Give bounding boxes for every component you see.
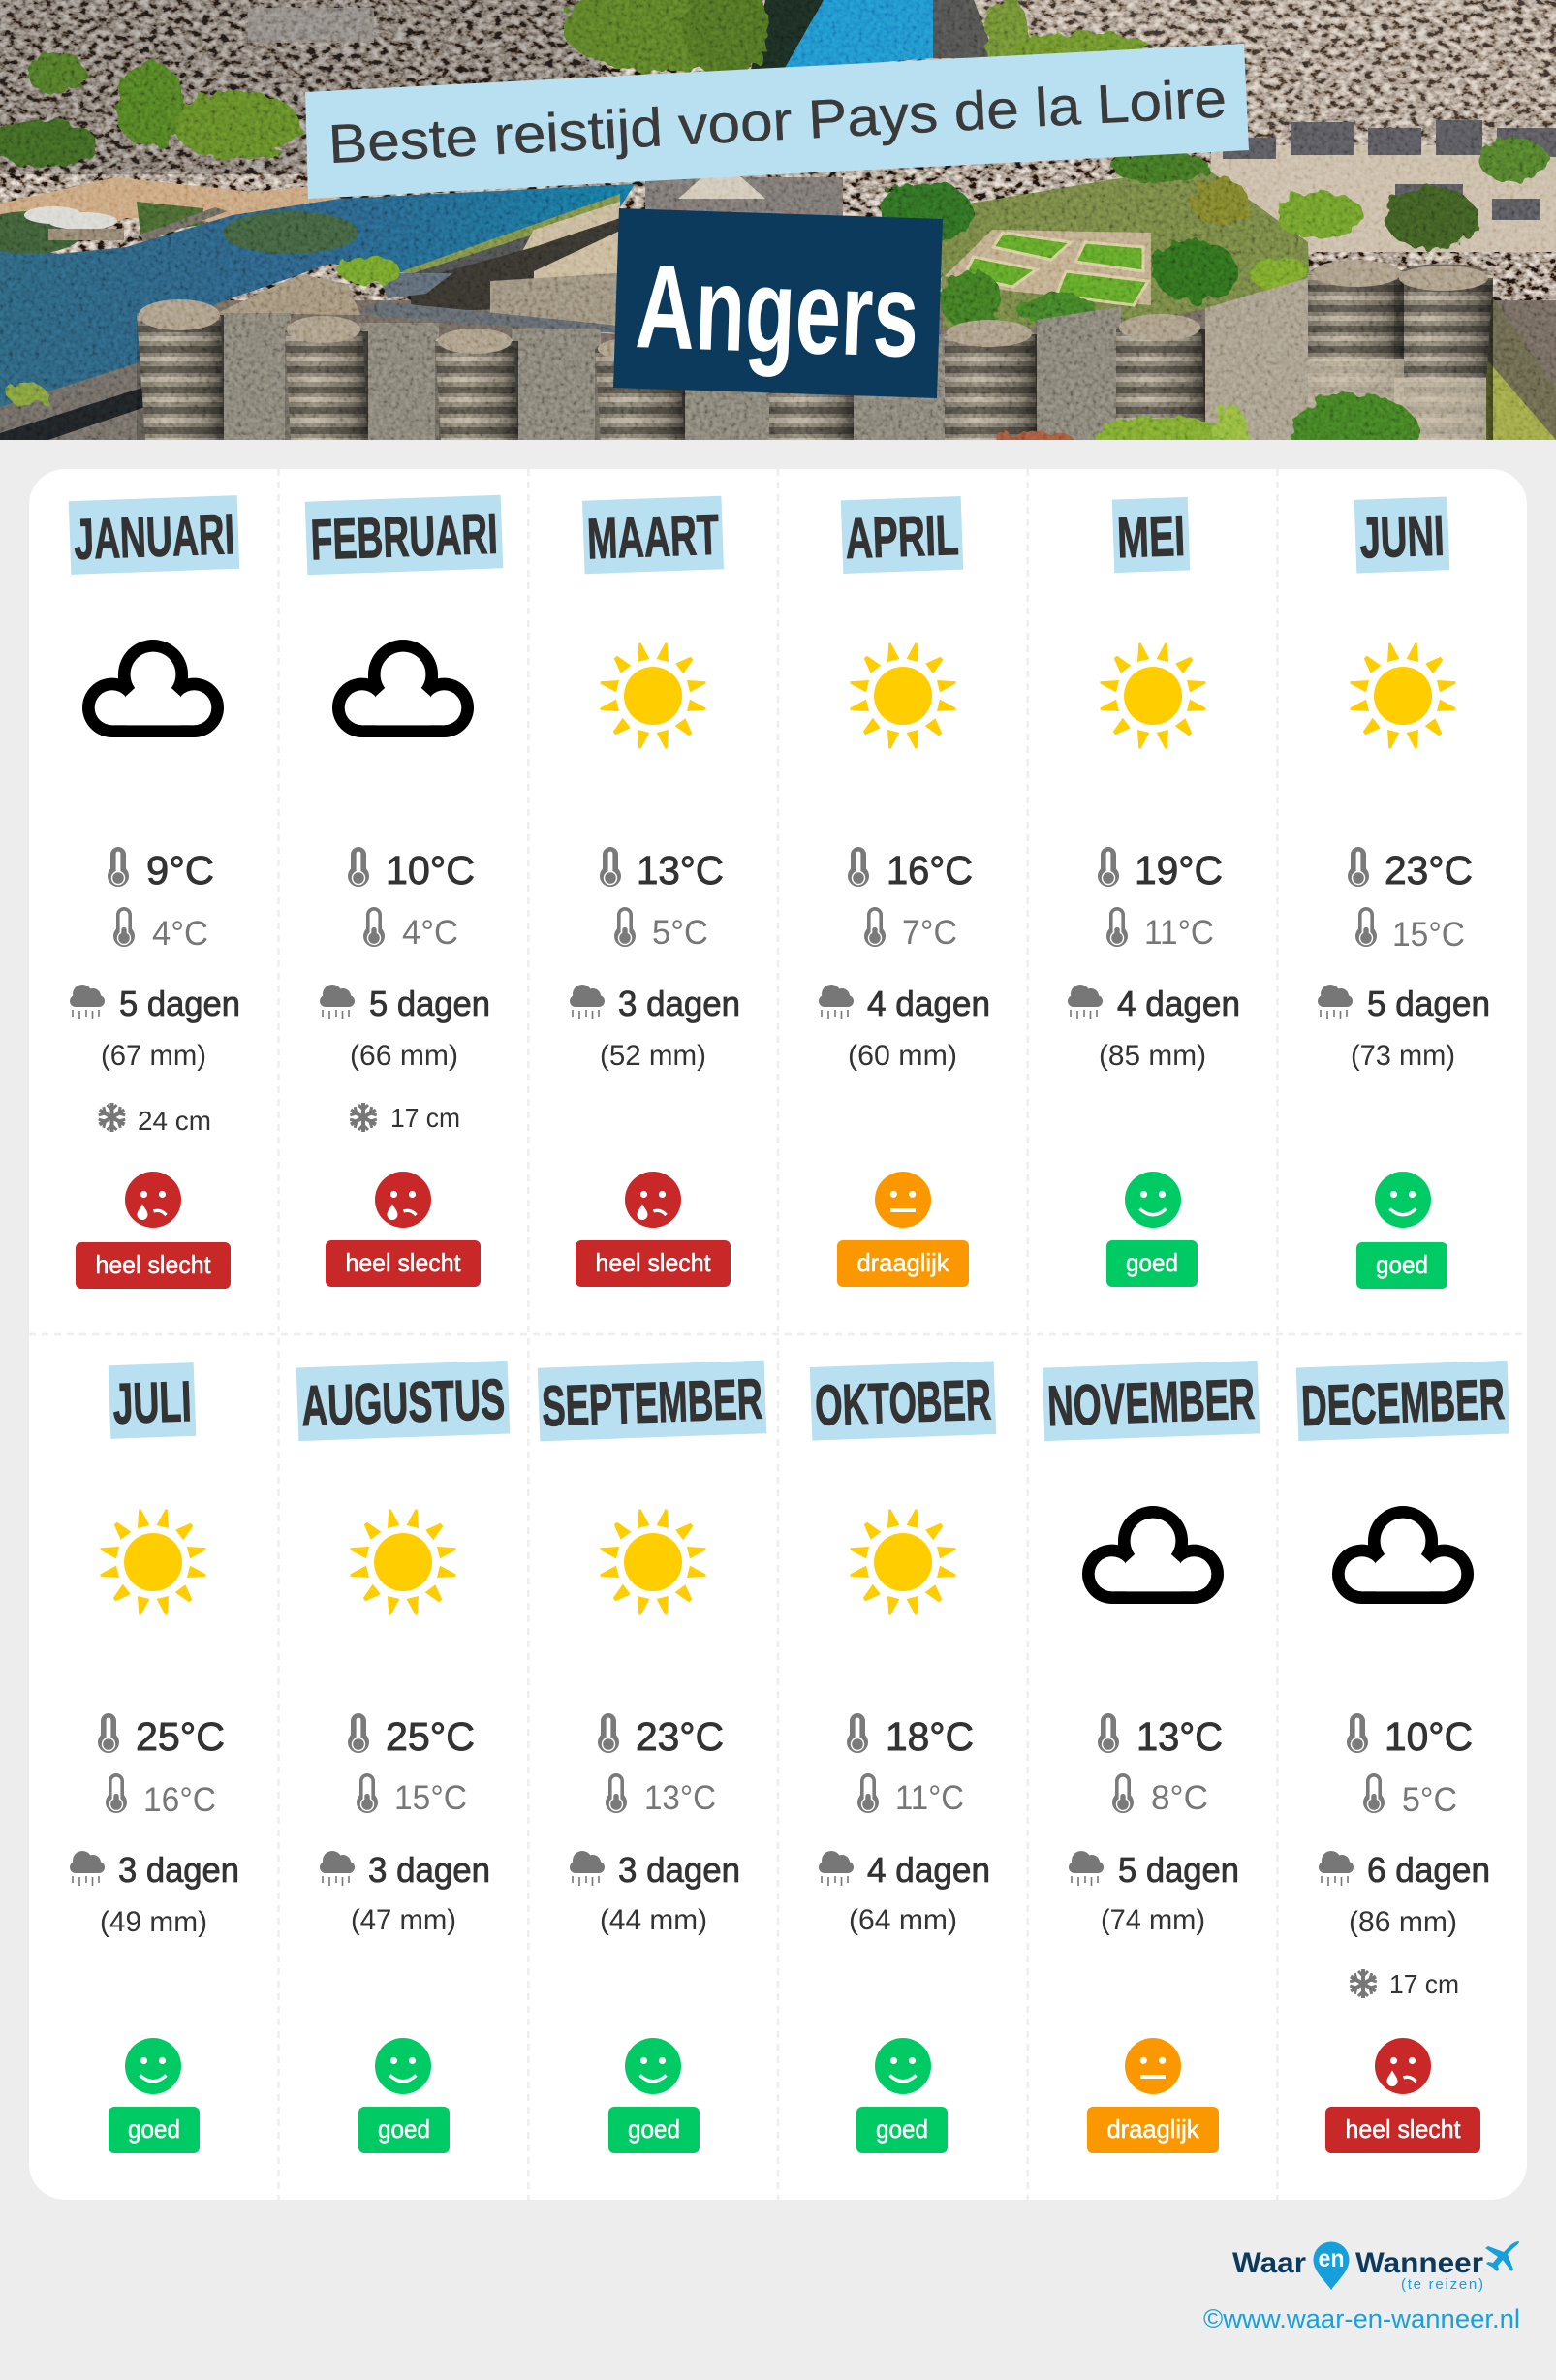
icon: thermometer low <box>857 1773 879 1813</box>
heading: november <box>1043 1361 1260 1441</box>
heading: maart: MAART <box>586 503 720 571</box>
heading: juli <box>109 1362 196 1439</box>
rating badge: goed <box>128 2114 180 2144</box>
max temperature: 16°C <box>887 848 973 892</box>
rating badge: goed <box>628 2114 680 2144</box>
rating badge: heel slecht <box>595 1248 711 1277</box>
icon: happy face <box>1125 1172 1181 1228</box>
website credit: ©www.waar-en-wanneer.nl <box>1203 2304 1520 2333</box>
max temperature: 23°C <box>1385 848 1473 892</box>
icon: sun <box>101 1510 205 1614</box>
rainy days: 6 dagen <box>1367 1850 1490 1890</box>
month: augustus <box>296 1361 510 2153</box>
icon: rain <box>570 1851 605 1886</box>
plaza and inner walls <box>490 202 620 334</box>
trees <box>0 0 1548 406</box>
icon: cloud <box>82 640 224 737</box>
min temperature: 5°C <box>652 914 708 952</box>
icon: sun <box>851 643 955 748</box>
icon: happy face <box>625 2038 681 2094</box>
month: december <box>1296 1361 1509 2153</box>
month: juli <box>70 1362 239 2153</box>
icon: rain <box>70 1851 105 1886</box>
heading: augustus <box>296 1361 510 1441</box>
icon: happy face <box>125 2038 181 2094</box>
icon: cloud <box>332 640 474 737</box>
rainfall: (86 mm) <box>1349 1906 1457 1938</box>
rainfall: (47 mm) <box>351 1904 456 1936</box>
min temperature: 4°C <box>402 914 458 952</box>
icon: sun <box>851 1510 955 1614</box>
rainy days: 4 dagen <box>867 1850 990 1890</box>
road and lower riverbank <box>0 404 9 407</box>
rainy days: 5 dagen <box>1118 1850 1239 1890</box>
icon: thermometer low <box>1106 907 1128 947</box>
icon: thermometer low <box>1355 907 1377 947</box>
icon: sun <box>601 1510 705 1614</box>
icon: snowflake <box>349 1103 378 1132</box>
heading: september <box>538 1361 766 1441</box>
icon: thermometer high <box>600 847 621 887</box>
icon: happy face <box>375 2038 431 2094</box>
heading: mei <box>1112 497 1190 573</box>
max temperature: 25°C <box>386 1714 475 1759</box>
icon: neutral face <box>1125 2038 1181 2094</box>
buildings on the right <box>1211 145 1556 252</box>
upper river <box>784 0 933 70</box>
heading: juni <box>1354 497 1449 573</box>
heading: januari <box>69 495 239 575</box>
icon: sun <box>1351 643 1455 748</box>
rainy days: 5 dagen <box>369 984 490 1023</box>
min temperature: 15°C <box>1392 916 1465 954</box>
icon: happy face <box>875 2038 931 2094</box>
rainfall: (49 mm) <box>100 1906 207 1938</box>
panel: monthly climate calendar <box>29 469 1527 2200</box>
icon: thermometer low <box>864 907 886 947</box>
icon: thermometer high <box>108 847 129 887</box>
icon: rain <box>819 1851 854 1886</box>
heading: augustus: AUGUSTUS <box>300 1367 506 1438</box>
icon: thermometer low <box>614 907 636 947</box>
max temperature: 18°C <box>886 1714 974 1759</box>
icon: very bad face <box>1375 2038 1431 2094</box>
rainy days: 5 dagen <box>119 984 240 1023</box>
icon: rain <box>1069 1851 1104 1886</box>
icon: cloud <box>1082 1506 1224 1604</box>
heading: maart <box>582 496 724 574</box>
max temperature: 9°C <box>146 848 214 892</box>
icon: snowflake <box>1349 1969 1378 1998</box>
hero photo: aerial view of Angers castle and the Maine river <box>0 0 1556 468</box>
min temperature: 7°C <box>902 914 957 952</box>
icon: thermometer high <box>98 1713 119 1753</box>
rating badge: goed <box>378 2114 430 2144</box>
title banner <box>305 44 1249 199</box>
icon: very bad face <box>125 1172 181 1228</box>
rating badge <box>109 2107 200 2153</box>
max temperature: 13°C <box>1136 1714 1223 1759</box>
rating badge <box>358 2107 450 2153</box>
rating badge <box>76 1242 231 1289</box>
min temperature: 8°C <box>1151 1779 1208 1817</box>
icon: thermometer low <box>357 1773 378 1813</box>
icon: rain <box>1318 985 1353 1019</box>
rating badge <box>1106 1240 1198 1287</box>
icon: thermometer high <box>848 847 869 887</box>
icon: thermometer high <box>847 1713 868 1753</box>
rainy days: 4 dagen <box>1117 984 1240 1023</box>
rainy days: 3 dagen <box>618 1850 740 1890</box>
rating badge: heel slecht <box>345 1248 461 1277</box>
logo: Waar en Wanneer: Wanneer <box>1355 2247 1483 2279</box>
rainfall: (64 mm) <box>849 1904 957 1936</box>
icon: happy face <box>1375 1172 1431 1228</box>
moored boats <box>24 206 124 240</box>
heading: april <box>841 496 963 574</box>
heading: juni: JUNI <box>1358 504 1446 570</box>
icon: thermometer high <box>1347 1713 1368 1753</box>
rating badge <box>856 2107 948 2153</box>
min temperature: 4°C <box>152 915 208 953</box>
heading: november: NOVEMBER <box>1046 1367 1256 1438</box>
rainfall: (66 mm) <box>350 1040 458 1072</box>
max temperature: 10°C <box>386 848 475 892</box>
month: april <box>819 496 990 1287</box>
castle towers <box>137 261 1493 440</box>
rating badge: draaglijk <box>1106 2114 1199 2144</box>
garden terraces <box>940 165 1310 329</box>
heading: april: APRIL <box>844 503 960 571</box>
heading: februari: FEBRUARI <box>309 502 499 572</box>
icon: thermometer high <box>348 847 369 887</box>
icon: thermometer low <box>1112 1773 1134 1813</box>
icon: thermometer high <box>1098 847 1119 887</box>
icon: snowflake <box>97 1103 127 1132</box>
heading: januari: JANUARI <box>73 502 235 572</box>
icon: thermometer high <box>348 1713 369 1753</box>
icon: thermometer low <box>606 1773 627 1813</box>
icon: sun <box>601 643 705 748</box>
icon: very bad face <box>625 1172 681 1228</box>
icon: rain <box>320 985 355 1019</box>
heading: oktober: OKTOBER <box>814 1367 992 1438</box>
icon: thermometer low <box>113 907 135 947</box>
rating badge: heel slecht <box>95 1250 211 1279</box>
icon: sun <box>351 1510 455 1614</box>
icon: thermometer low <box>106 1773 127 1813</box>
max temperature: 25°C <box>136 1714 225 1759</box>
rainy days: 5 dagen <box>1367 984 1490 1023</box>
icon: thermometer low <box>363 907 385 947</box>
icon: map pin: en <box>1318 2245 1345 2272</box>
rating badge <box>608 2107 700 2153</box>
icon: rain <box>70 985 105 1019</box>
heading: september: SEPTEMBER <box>541 1367 763 1438</box>
heading: oktober <box>810 1361 996 1441</box>
large river <box>0 184 635 407</box>
icon: rain <box>819 985 854 1019</box>
castle walls <box>217 277 1310 440</box>
rainfall: (60 mm) <box>848 1040 957 1072</box>
rainfall: (44 mm) <box>600 1904 707 1936</box>
min temperature: 11°C <box>895 1779 964 1817</box>
rainfall: (52 mm) <box>600 1040 706 1072</box>
icon: neutral face <box>875 1172 931 1228</box>
min temperature: 15°C <box>394 1779 467 1817</box>
min temperature: 11°C <box>1144 914 1214 952</box>
icon: rain <box>1319 1851 1354 1886</box>
icon: very bad face <box>375 1172 431 1228</box>
logo: Waar en Wanneer: (te reizen) <box>1401 2276 1483 2293</box>
month: februari <box>305 495 503 1287</box>
min temperature: 16°C <box>143 1781 216 1819</box>
foreground trees <box>996 391 1420 440</box>
logo: Waar en Wanneer: Waar <box>1232 2247 1306 2279</box>
month: mei <box>1068 497 1240 1287</box>
rainfall: (74 mm) <box>1101 1904 1205 1936</box>
rating badge <box>1356 1242 1447 1289</box>
month: november <box>1043 1361 1260 2153</box>
min temperature: 5°C <box>1402 1781 1457 1819</box>
icon: rain <box>1068 985 1103 1019</box>
heading: februari <box>305 495 503 575</box>
max temperature: 13°C <box>637 848 724 892</box>
rainfall: (85 mm) <box>1099 1040 1206 1072</box>
icon: map pin <box>1314 2242 1349 2290</box>
icon: cloud <box>1332 1506 1474 1604</box>
rainy days: 3 dagen <box>368 1850 490 1890</box>
heading: mei: MEI <box>1116 504 1186 570</box>
rating badge: goed <box>876 2114 928 2144</box>
snowfall: 24 cm <box>138 1106 211 1136</box>
max temperature: 10°C <box>1385 1714 1473 1759</box>
rainy days: 3 dagen <box>118 1850 239 1890</box>
month: juni <box>1318 497 1490 1289</box>
rating badge: goed <box>1376 1250 1428 1279</box>
icon: rain <box>320 1851 355 1886</box>
rating badge <box>576 1240 731 1287</box>
heading: juli: JULI <box>111 1369 193 1436</box>
icon: thermometer high <box>1098 1713 1119 1753</box>
rating badge <box>1325 2107 1480 2153</box>
rating badge <box>837 1240 969 1287</box>
rainy days: 4 dagen <box>867 984 990 1023</box>
rainy days: 3 dagen <box>618 984 740 1023</box>
logo: Waar en Wanneer <box>1232 2241 1519 2293</box>
icon: thermometer high <box>1348 847 1369 887</box>
rating badge: heel slecht <box>1345 2114 1461 2144</box>
icon: airplane <box>1485 2241 1519 2271</box>
rating badge <box>1087 2107 1219 2153</box>
min temperature: 13°C <box>644 1779 716 1817</box>
icon: rain <box>570 985 605 1019</box>
snowfall: 17 cm <box>1389 1969 1459 1999</box>
icon: sun <box>1101 643 1205 748</box>
city name box: Angers <box>613 208 943 398</box>
month: september <box>538 1361 766 2153</box>
icon: thermometer low <box>1363 1773 1385 1813</box>
rainfall: (67 mm) <box>101 1040 206 1072</box>
month: oktober <box>810 1361 996 2153</box>
title banner: Beste reistijd voor Pays de la Loire <box>327 67 1228 174</box>
max temperature: 19°C <box>1135 848 1223 892</box>
month: maart <box>570 496 740 1287</box>
icon: thermometer high <box>598 1713 619 1753</box>
rating badge <box>326 1240 481 1287</box>
snowfall: 17 cm <box>390 1103 460 1133</box>
max temperature: 23°C <box>636 1714 724 1759</box>
city name box: Angers: Angers <box>634 240 921 383</box>
month: januari <box>69 495 240 1289</box>
rating badge: draaglijk <box>856 1248 949 1277</box>
rating badge: goed <box>1126 1248 1178 1277</box>
rainfall: (73 mm) <box>1351 1040 1455 1072</box>
